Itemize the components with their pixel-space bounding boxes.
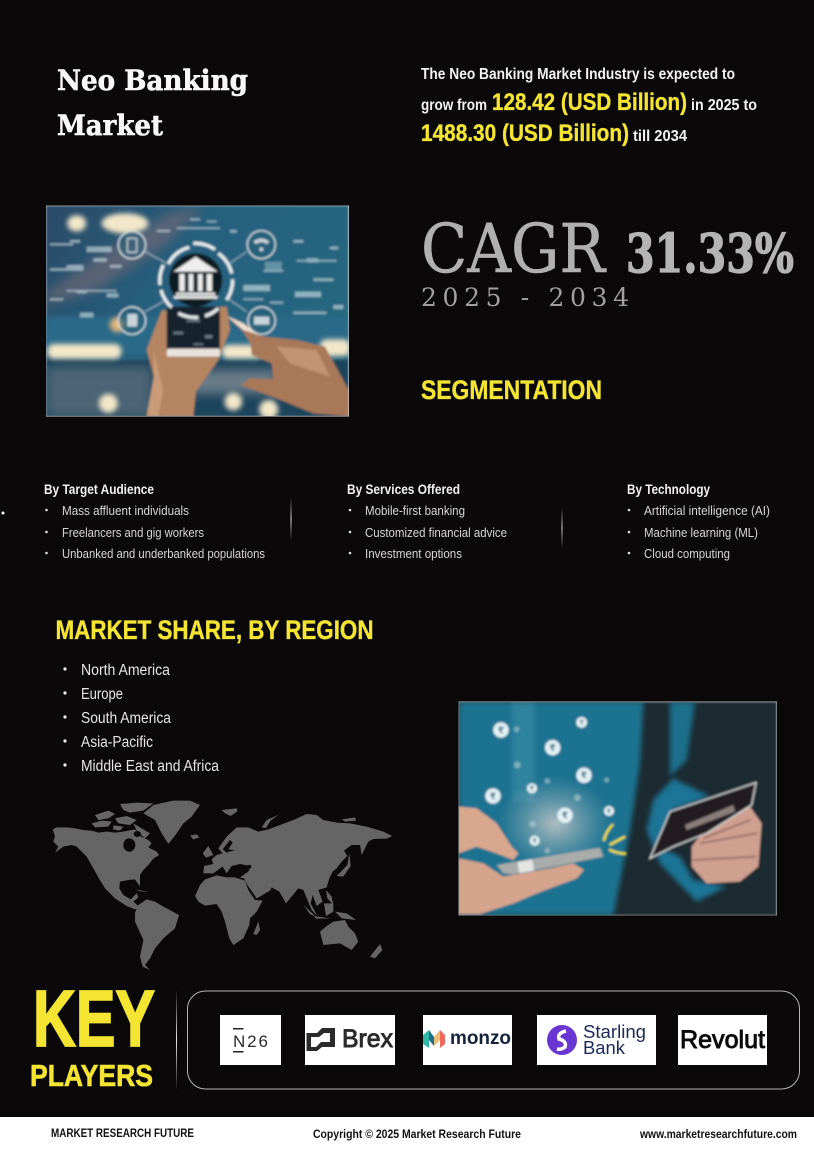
photo: phone payment with credit card (458, 702, 777, 916)
segment: by technology: By Technology (627, 481, 710, 497)
region list: Middle East and Africa (81, 758, 219, 775)
market share heading: MARKET SHARE, BY REGION (56, 615, 374, 645)
logo: Brex (305, 1015, 395, 1065)
region list: Europe (81, 686, 123, 703)
title (57, 64, 248, 142)
segment: by services offered: Customized financial advice (365, 526, 507, 540)
region list: North America (81, 662, 170, 679)
market forecast text: till 2034 (633, 128, 687, 145)
key players heading (30, 974, 155, 1093)
segmentation heading: SEGMENTATION (421, 375, 602, 405)
data specks (50, 218, 343, 317)
key players heading: KEY (33, 974, 155, 1063)
CAGR value: CAGR (421, 210, 607, 288)
region list: Asia-Pacific (81, 734, 153, 751)
logo: monzo: monzo (450, 1028, 511, 1049)
logo: Revolut (678, 1015, 767, 1065)
title: Market (57, 109, 163, 142)
segment: by technology: Cloud computing (644, 547, 730, 561)
photo: phone payment with credit card: ₹ (530, 786, 535, 793)
segment: by services offered: Investment options (365, 547, 462, 561)
segment: by target audience (44, 481, 265, 561)
segment: by target audience: By Target Audience (44, 481, 154, 497)
segment: by target audience: Mass affluent individuals (62, 504, 189, 518)
photo: phone payment with credit card: ₹ (532, 838, 537, 845)
footer: MARKET RESEARCH FUTURE (51, 1126, 194, 1140)
photo: phone payment with credit card: ₹ (581, 771, 588, 782)
segment: by target audience: Freelancers and gig workers (62, 526, 204, 540)
photo: phone payment with credit card: ₹ (607, 808, 612, 815)
market forecast text: The Neo Banking Market Industry is expected to (421, 66, 735, 83)
market forecast text: grow from (421, 97, 487, 114)
photo: phone payment with credit card: ₹ (579, 720, 584, 727)
footer: Copyright © 2025 Market Research Future (313, 1127, 521, 1141)
logo: Revolut: Revolut (680, 1026, 765, 1054)
logo: Starling Bank: Bank (583, 1038, 626, 1058)
logo: N26 (220, 1015, 281, 1065)
region list: South America (81, 710, 171, 727)
market forecast text: in 2025 to (691, 97, 757, 114)
segment: by technology: Machine learning (ML) (644, 526, 758, 540)
small stray dot (2, 512, 4, 514)
logo: Brex: Brex (342, 1025, 393, 1053)
key players heading: PLAYERS (30, 1058, 153, 1093)
bokeh lights (47, 213, 350, 419)
right hand (692, 807, 762, 883)
photo: hand holding phone with bank icon (46, 206, 350, 419)
phone (497, 848, 603, 874)
footer (0, 1117, 814, 1150)
market forecast text: 128.42 (USD Billion) (492, 89, 687, 116)
title: Neo Banking (57, 64, 248, 97)
world map (53, 801, 392, 970)
logo: monzo (423, 1015, 512, 1065)
segment: by technology: Artificial intelligence (AI) (644, 504, 770, 518)
hand and phone (147, 307, 230, 416)
logo: Starling Bank (537, 1015, 656, 1065)
left hand (459, 807, 518, 860)
CAGR value (421, 210, 794, 312)
region list (63, 662, 219, 775)
rupee coins (485, 717, 614, 846)
segment: by services offered: By Services Offered (347, 481, 460, 497)
connector lines (145, 252, 247, 312)
bank emblem (169, 253, 222, 307)
segment: by target audience: Unbanked and underbanked populations (62, 547, 265, 561)
photo: phone payment with credit card: ₹ (562, 811, 569, 822)
market forecast text: 1488.30 (USD Billion) (421, 120, 629, 147)
photo: phone payment with credit card: ₹ (549, 743, 556, 754)
credit card (650, 783, 756, 858)
logo: N26: N26 (233, 1032, 268, 1051)
CAGR value: 2025 - 2034 (421, 283, 629, 312)
small circle icons (118, 231, 275, 334)
market forecast text (421, 66, 757, 147)
segment: by services offered: Mobile-first banking (365, 504, 465, 518)
photo: phone payment with credit card: ₹ (490, 791, 497, 802)
logo: Starling Bank: Starling (583, 1022, 646, 1042)
key players panel (188, 991, 800, 1089)
segment: by services offered (347, 481, 507, 561)
yellow sparks (604, 825, 625, 854)
segment: by technology (627, 481, 770, 561)
photo: phone payment with credit card: ₹ (498, 725, 505, 736)
